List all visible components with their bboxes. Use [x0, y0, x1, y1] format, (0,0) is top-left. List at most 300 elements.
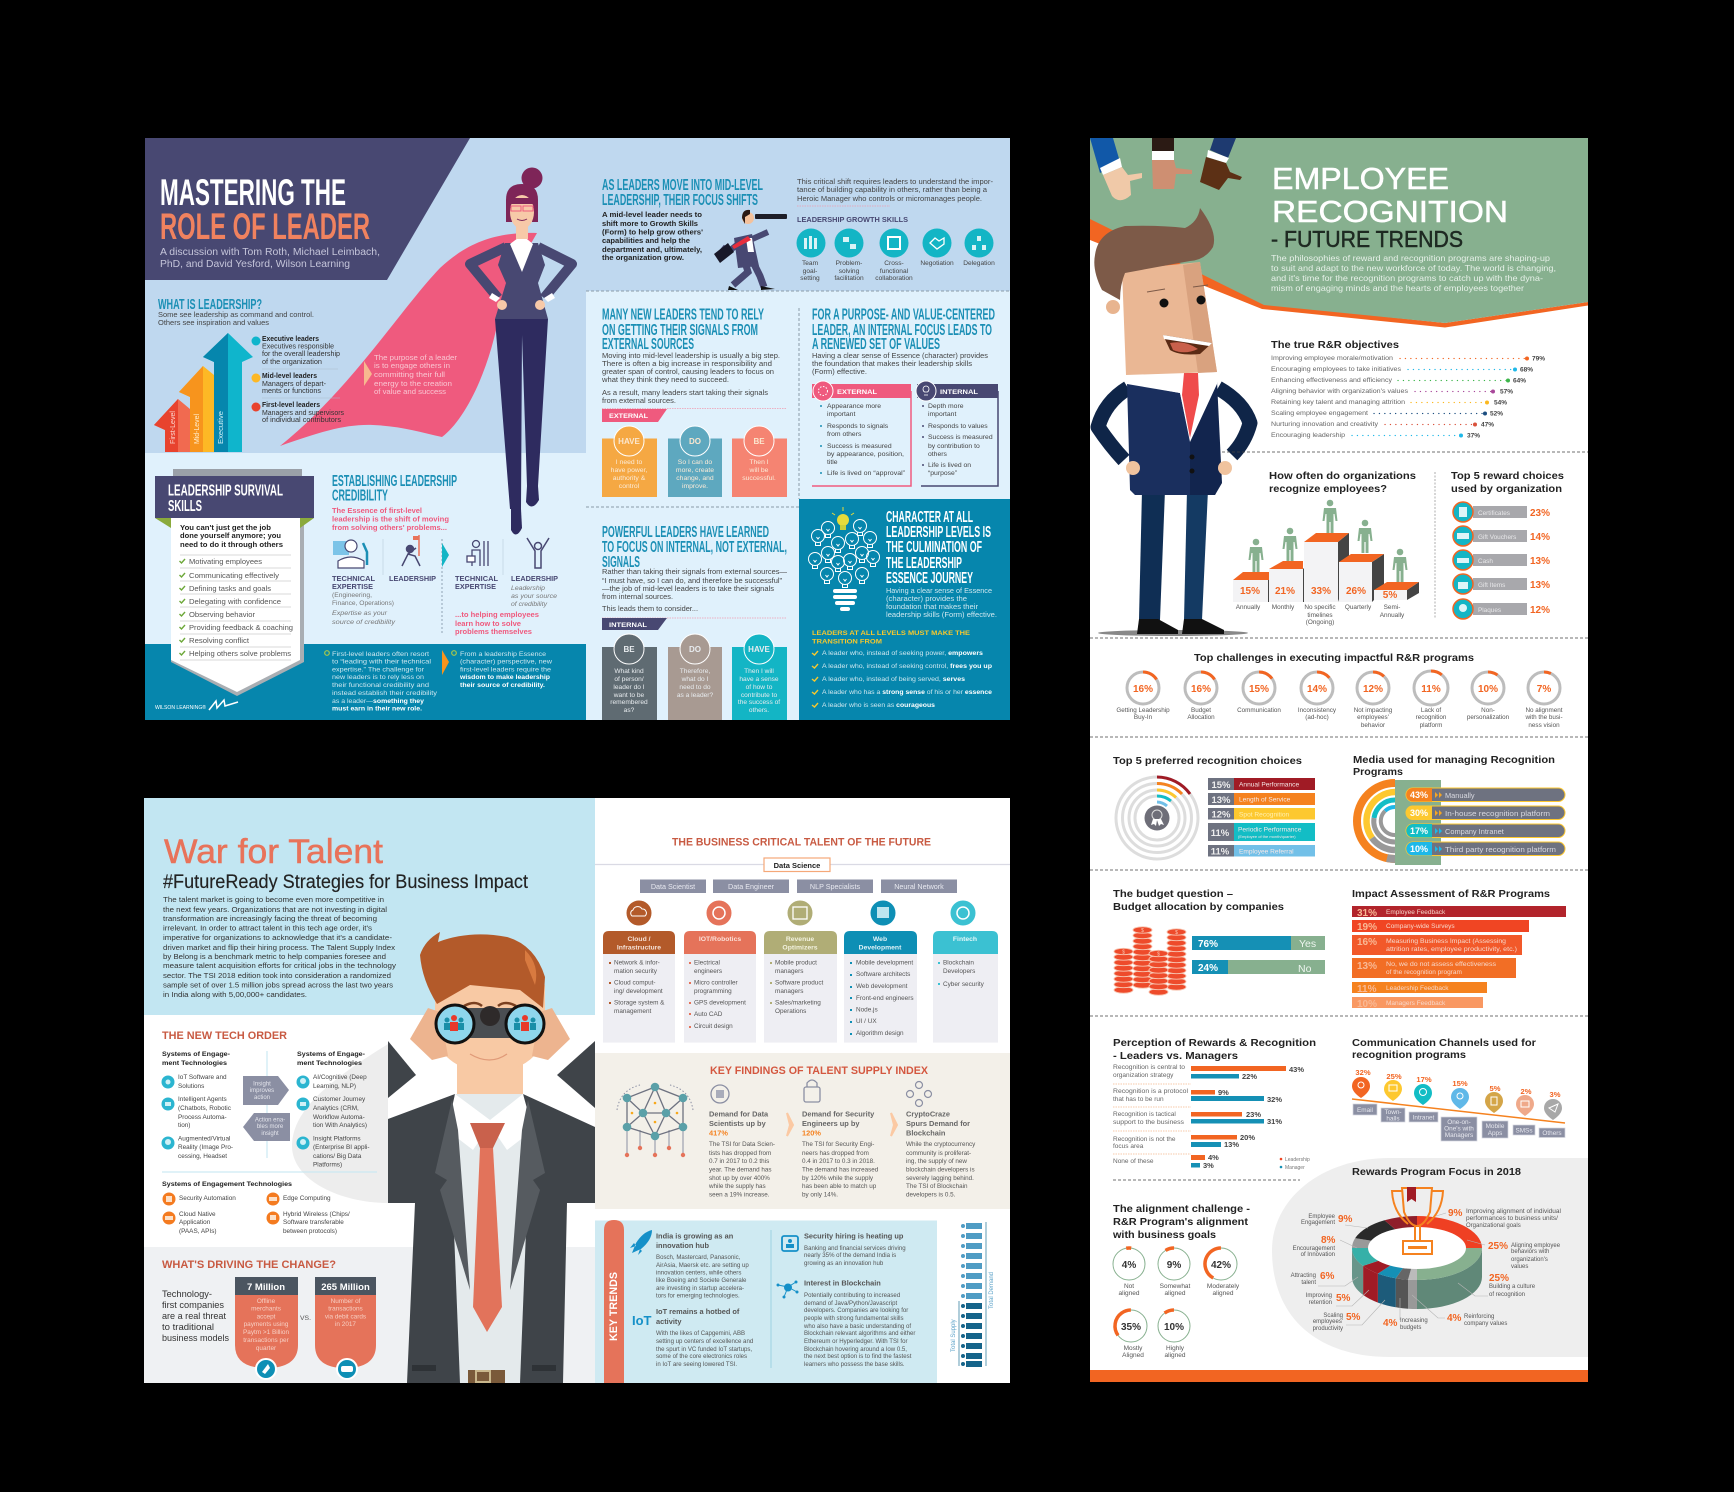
internal box: Life is lived on: [928, 462, 971, 469]
growth skills icons: functional: [880, 268, 909, 275]
column: cloud infrastructure: Storage system &: [614, 1000, 665, 1007]
dotted lollipop chart: 54%: [1494, 400, 1507, 406]
trend: security hiring: [804, 1232, 906, 1267]
icon: iot: IoT: [632, 1313, 652, 1328]
stat card: 7 million: 7 Million: [247, 1282, 285, 1293]
column: iot robotics: Circuit design: [694, 1023, 733, 1030]
finding: crypto craze: CryptoCraze: [906, 1109, 950, 1118]
section: the new tech order: Insight Platforms: [313, 1136, 361, 1142]
section: top challenges: Buy-In: [1134, 714, 1153, 721]
skills checklist: Providing feedback & coaching: [189, 623, 293, 632]
finding: crypto craze: Spurs Demand for: [906, 1119, 970, 1128]
internal box: Responds to values: [928, 423, 988, 430]
transition list: A leader who, instead of seeking power, empowers: [822, 650, 983, 657]
grouped bar chart: 23%: [1246, 1110, 1261, 1119]
external box: Appearance more: [827, 403, 881, 410]
trend: iot hotbed: some of the core electronics roles: [656, 1353, 747, 1360]
grouped bar chart: support to the business: [1113, 1119, 1185, 1126]
teal note: their source of credibility.: [460, 682, 545, 689]
leader levels list: Managers of depart-: [262, 381, 327, 388]
role tags: Data Scientist: [651, 882, 695, 891]
section: external signals: [601, 306, 787, 497]
impact bars: of the recognition program: [1386, 969, 1462, 976]
callout on cape: [364, 353, 458, 396]
impact bars: Measuring Business Impact (Assessing: [1386, 938, 1506, 945]
skills checklist: [180, 555, 293, 660]
trend: blockchain: Interest in Blockchain: [804, 1279, 881, 1288]
section: budget question: [1113, 889, 1325, 995]
transition list: A leader who, instead of being served, serves: [822, 676, 965, 683]
section: communication channels: [1352, 1037, 1565, 1141]
section: establishing leadership credibility: of credibility: [511, 601, 548, 608]
stat card: 7 million: [235, 1277, 298, 1379]
icon: trophy: [1392, 1187, 1443, 1254]
channel labels: Email: [1357, 1107, 1373, 1114]
column: iot robotics: Electrical: [694, 960, 720, 966]
section: perception leaders vs managers: - Leaders vs. Managers: [1113, 1050, 1238, 1062]
section: internal signals: —the job of mid-level leaders is to take their signals: [602, 586, 775, 593]
skills checklist: Communicating effectively: [189, 571, 279, 580]
finding: crypto craze: While the cryptocurrency: [906, 1141, 976, 1148]
column: web development: [844, 900, 917, 1043]
channel labels: One-on-: [1447, 1119, 1471, 1126]
section: internal signals: from internal sources.: [602, 594, 673, 601]
arrow: action enables more insight: insight: [261, 1131, 279, 1137]
be do have cards: others.: [749, 707, 769, 714]
icon: coin stacks: $: [1141, 928, 1144, 934]
section: what's driving the change: business models: [162, 1332, 229, 1343]
intro paragraph: by Belong is a benchmark metric to help companies foresee and: [163, 952, 386, 961]
radial target chart: [1116, 777, 1198, 859]
column: cloud infrastructure: Infrastructure: [617, 944, 661, 952]
impact bars: 13%: [1357, 961, 1377, 972]
be do have cards: of how to: [746, 684, 773, 691]
section: establishing leadership credibility: LEADERSHIP: [389, 576, 436, 583]
section: top 5 reward choices: Plaques: [1478, 607, 1501, 614]
section: key findings: KEY FINDINGS OF TALENT SUPPLY INDEX: [710, 1065, 929, 1077]
finding: crypto craze: developers is 0.5.: [906, 1191, 956, 1198]
column: cloud infrastructure: ing/ development: [614, 988, 663, 995]
podium chart: (Ongoing): [1306, 619, 1334, 626]
callout percentages: 6%: [1320, 1271, 1335, 1282]
teal note: [325, 650, 552, 712]
trend: blockchain: the next best option is to find the fastest: [804, 1353, 912, 1360]
section: top 5 reward choices: 13%: [1530, 580, 1550, 591]
leader levels list: for the overall leadership: [262, 351, 340, 358]
be do have cards: BE: [623, 645, 635, 654]
internal box: Depth more: [928, 403, 964, 410]
icon: id badge: [782, 1236, 798, 1251]
impact bars: attrition rates, employee productivity, etc.): [1386, 946, 1517, 953]
callout labels: talent: [1301, 1280, 1316, 1286]
callout percentages: 4%: [1447, 1313, 1462, 1324]
column: web development: Web: [873, 936, 887, 943]
section: top challenges: recognition: [1416, 714, 1447, 721]
section: true r&r objectives: The true R&R objectives: [1271, 339, 1399, 351]
section: alignment challenge: aligned: [1165, 1290, 1186, 1297]
grouped bar chart: Recognition is tactical: [1113, 1111, 1176, 1118]
transition list: A leader who, instead of seeking control, frees you up: [822, 663, 992, 670]
panel: leadership survival skills: You can't just get the job: [180, 523, 271, 532]
trend: blockchain: Blockchain hovering around a low 0.5,: [804, 1346, 907, 1353]
channel labels: Mobile: [1486, 1123, 1505, 1130]
budget bars: No: [1298, 963, 1312, 975]
section: communication channels: 2%: [1521, 1087, 1532, 1096]
icon: coin stacks: $: [1122, 950, 1125, 956]
teal note: First-level leaders often resort: [332, 651, 429, 658]
finding: data scientists: while the supply has: [708, 1183, 766, 1190]
section: internal signals: “I must have, so I can do, and therefore be successful”: [602, 578, 783, 585]
section: character at all levels: THE LEADERSHIP: [886, 555, 962, 572]
growth skills icons: Cross-: [884, 260, 904, 267]
section: establishing leadership credibility: [332, 473, 558, 636]
media pills: [1406, 788, 1565, 856]
teal note: as a leader—something they: [332, 698, 424, 705]
section: internal focus values: LEADER, AN INTERNAL FOCUS LEADS TO: [812, 322, 992, 339]
trend: innovation hub: are investing in startup accelera-: [656, 1285, 744, 1292]
section: top challenges: [1116, 653, 1563, 729]
teal note: (character) perspective, new: [460, 658, 552, 666]
be do have cards: as?: [624, 707, 635, 714]
stat card: 265 million: Number of: [331, 1298, 361, 1305]
grouped bar chart: None of these: [1113, 1158, 1154, 1165]
section: alignment challenge: aligned: [1213, 1290, 1234, 1297]
teal note: to “leading with their technical: [332, 658, 432, 666]
icon: technician: [333, 540, 367, 568]
be do have cards: the success of: [738, 699, 780, 706]
callout percentages: 25%: [1489, 1273, 1509, 1284]
section: business critical talent: THE BUSINESS CRITICAL TALENT OF THE FUTURE: [672, 836, 931, 848]
internal box: important: [928, 411, 956, 418]
chart: total supply vs demand: [951, 1222, 995, 1367]
section: mid-level focus shifts: the organization grow.: [602, 253, 684, 262]
dotted lollipop chart: Scaling employee engagement: [1271, 410, 1368, 417]
section: how often recognize: How often do organizations: [1269, 470, 1416, 482]
stat card: 7 million: quarter: [256, 1345, 277, 1352]
leader levels list: [252, 336, 344, 424]
section: establishing leadership credibility: problems themselves: [455, 627, 532, 636]
section: external signals: There is often a big increase in responsibility and: [602, 361, 772, 368]
callout labels: of recognition: [1489, 1292, 1525, 1298]
column: fintech: [933, 900, 998, 1043]
section: communication channels: 15%: [1452, 1079, 1468, 1088]
column: revenue optimizers: managers: [775, 988, 803, 995]
budget bars: [1192, 936, 1325, 975]
callout percentages: 25%: [1488, 1241, 1508, 1252]
trend: iot hotbed: IoT remains a hotbed of: [656, 1307, 740, 1316]
column: web development: Software architects: [856, 971, 910, 978]
section: establishing leadership credibility: The Essence of first-level: [332, 506, 422, 515]
external box: Success is measured: [827, 443, 892, 450]
column: cloud infrastructure: Cloud comput-: [614, 979, 656, 986]
icon: coin stacks: [1114, 927, 1186, 995]
media pills: In-house recognition platform: [1445, 809, 1550, 818]
role tags: Data Engineer: [728, 882, 775, 891]
channel labels: [1353, 1104, 1565, 1141]
skills checklist: Resolving conflict: [189, 636, 249, 645]
column: revenue optimizers: Sales/marketing: [775, 1000, 821, 1007]
section: external signals: ON GETTING THEIR SIGNALS FROM: [602, 322, 758, 339]
trend: blockchain: Blockchain relevant algorithms and either: [804, 1330, 915, 1337]
grouped bar chart: 31%: [1267, 1117, 1282, 1126]
panel: leadership survival skills: [155, 469, 314, 696]
section: establishing leadership credibility: source of credibility: [332, 619, 396, 626]
leader levels list: Managers and supervisors: [262, 410, 344, 417]
channel labels: Apps: [1488, 1130, 1502, 1137]
podium chart: Monthly: [1272, 604, 1295, 611]
section: top challenges: with the busi-: [1524, 714, 1563, 721]
title banner: MASTERING THE: [160, 172, 346, 213]
trend: iot hotbed: in IoT are seeing lowered TSI.: [656, 1361, 737, 1368]
transition list: A leader who has a strong sense of his or her essence: [822, 689, 992, 696]
callout labels: Increasing: [1400, 1318, 1428, 1324]
be do have cards: Therefore,: [680, 668, 710, 675]
section: the new tech order: Edge Computing: [283, 1195, 331, 1202]
panel: leadership survival skills: done yourself anymore; you: [180, 531, 281, 540]
section: establishing leadership credibility: TECHNICAL: [332, 576, 376, 583]
section: character at all levels: THE CULMINATION OF: [886, 539, 982, 556]
be do have cards: remembered: [610, 699, 648, 706]
role tags: Neural Network: [894, 882, 944, 891]
section: what's driving the change: Technology-: [162, 1288, 212, 1299]
dotted lollipop chart: Enhancing effectiveness and efficiency: [1271, 377, 1393, 384]
section: character at all levels: Having a clear sense of Essence: [886, 588, 992, 595]
section: the new tech order: Learning, NLP): [313, 1083, 356, 1090]
trend: security hiring: Banking and financial services driving: [804, 1245, 906, 1252]
skills checklist: Defining tasks and goals: [189, 584, 271, 593]
be do have cards: contribute to: [741, 692, 777, 699]
impact bars: [1352, 906, 1566, 1010]
section: alignment challenge: 35%: [1121, 1322, 1141, 1333]
section: internal signals: SIGNALS: [602, 554, 640, 571]
teal note: their functional credibility and: [332, 682, 429, 689]
stat card: 7 million: Offline: [257, 1298, 276, 1305]
section: top challenges: Lack of: [1421, 707, 1441, 714]
section: top 5 reward choices: Gift Vouchers: [1478, 534, 1516, 541]
teal note: expertise.” The challenge for: [332, 666, 425, 674]
teal note: new leaders is to rely less on: [332, 674, 424, 681]
header banner: [1090, 138, 1588, 323]
icon: three rising arrows: Mid-Level: [194, 414, 201, 444]
finding: security engineers: by 120% while the supply: [802, 1175, 874, 1182]
podium chart: timelines: [1307, 612, 1333, 619]
section: mid-level focus shifts: department and, ultimately,: [602, 245, 702, 254]
section: internal focus values: A RENEWED SET OF VALUES: [812, 336, 940, 353]
finding: data scientists: The TSI for Data Scien-: [709, 1141, 775, 1148]
trend: iot hotbed: activity: [656, 1317, 682, 1326]
media pills: Company Intranet: [1445, 827, 1504, 836]
section: character at all levels: (character) provides the: [886, 596, 967, 603]
title banner: PhD, and David Yesford, Wilson Learning: [160, 259, 350, 270]
callout labels: Scaling: [1323, 1313, 1343, 1319]
impact bars: 10%: [1357, 999, 1377, 1010]
dotted lollipop chart: Aligning behavior with organization's values: [1271, 388, 1409, 395]
finding: security engineers: has been able to match up: [802, 1183, 877, 1190]
section: top challenges: Top challenges in executing impactful R&R programs: [1194, 653, 1474, 664]
finding: data scientists: [708, 1085, 775, 1198]
section: the new tech order: (Enterprise BI appli-: [313, 1144, 369, 1151]
channel pins: [1352, 1077, 1562, 1120]
section: the new tech order: Systems of Engage-: [297, 1051, 365, 1058]
section: the new tech order: Workflow Automa-: [313, 1114, 365, 1121]
transition list: [812, 650, 992, 709]
finding: security engineers: Demand for Security: [802, 1109, 875, 1118]
stat card: 265 million: via debit cards: [325, 1314, 366, 1320]
intro paragraph: the next few years. Organizations that are not investing in digital: [163, 905, 387, 914]
section: mid-level focus shifts: capabilities and help the: [602, 236, 690, 245]
section: internal signals: INTERNAL: [609, 622, 647, 629]
section: top challenges: platform: [1420, 722, 1442, 729]
budget bars: 24%: [1198, 963, 1218, 974]
grouped bar chart: 32%: [1267, 1095, 1282, 1104]
column: web development: Mobile development: [856, 960, 913, 966]
icon: climbing leader: [402, 535, 420, 566]
callout labels: employees': [1313, 1319, 1343, 1325]
gray swoosh behind man: [292, 1044, 388, 1203]
header banner: to suit and adapt to the new workforce of today. The world is changing,: [1271, 263, 1556, 273]
trend: innovation hub: AirAsia, Maersk etc. are setting up: [656, 1262, 749, 1269]
column: web development: Node.js: [856, 1007, 878, 1014]
callout percentages: 5%: [1346, 1312, 1361, 1323]
callout labels: behaviors with: [1511, 1249, 1549, 1255]
title: #FutureReady Strategies for Business Impact: [163, 872, 529, 893]
grouped bar chart: organization strategy: [1113, 1072, 1174, 1079]
section: top 5 reward choices: Cash: [1478, 558, 1493, 565]
have do be cards: [602, 426, 787, 497]
column: cloud infrastructure: Cloud /: [627, 936, 651, 943]
column: fintech: Developers: [943, 968, 975, 975]
section: alignment challenge: aligned: [1165, 1352, 1186, 1359]
have do be cards: HAVE: [618, 437, 640, 446]
channel labels: SMSs: [1515, 1128, 1533, 1134]
skills checklist: Motivating employees: [189, 557, 262, 566]
trend: innovation hub: like Boeing and Societe Generale: [656, 1277, 747, 1284]
impact bars: 19%: [1357, 922, 1377, 933]
stacked bars: Employee Referral: [1239, 848, 1294, 856]
finding: security engineers: [802, 1080, 879, 1198]
section: business critical talent: [595, 836, 1010, 1043]
section: the new tech order: Cloud Native: [179, 1211, 216, 1218]
dotted lollipop chart: Improving employee morale/motivation: [1271, 355, 1393, 362]
section: rewards program focus: Rewards Program Focus in 2018: [1352, 1166, 1521, 1178]
have do be cards: I need to: [616, 459, 642, 466]
section: establishing leadership credibility: (Engineering,: [332, 592, 372, 599]
podium chart: No specific: [1304, 604, 1336, 611]
icon: man with telescope: [714, 210, 787, 290]
leader levels list: Executive leaders: [262, 336, 319, 343]
leader levels list: of individual contributors: [262, 417, 342, 424]
donut rings: [1127, 671, 1560, 705]
growth skills icons: solving: [839, 268, 860, 275]
section: top challenges: 7%: [1537, 684, 1551, 695]
internal box: Success is measured: [928, 434, 993, 441]
section: top challenges: Inconsistency: [1298, 707, 1337, 714]
dotted lollipop chart: 64%: [1513, 378, 1526, 384]
arrow: insight improves action: Insight: [253, 1082, 271, 1088]
section: external signals: from external sources.: [602, 398, 676, 405]
media pills: 10%: [1410, 844, 1428, 854]
section: communication channels: 32%: [1355, 1068, 1371, 1077]
impact bars: Managers Feedback: [1386, 1000, 1446, 1007]
orange tech icons: [162, 1192, 280, 1224]
column: web development: Web development: [856, 983, 908, 990]
section: the new tech order: THE NEW TECH ORDER: [162, 1030, 287, 1042]
section: mid-level focus shifts: A mid-level leader needs to: [602, 210, 702, 219]
section: top challenges: Non-: [1481, 707, 1495, 714]
panel: leadership survival skills: SKILLS: [168, 498, 202, 515]
callout labels: Aligning employee: [1511, 1243, 1561, 1249]
section: budget question: Budget allocation by companies: [1113, 902, 1284, 913]
callout labels: productivity: [1313, 1326, 1343, 1332]
section: what's driving the change: [162, 1259, 376, 1379]
section: mid-level focus shifts: LEADERSHIP, THEIR FOCUS SHIFTS: [602, 192, 758, 209]
trend: innovation hub: [656, 1232, 749, 1300]
section: top 5 reward choices: [1451, 470, 1564, 619]
dotted lollipop chart: Nurturing innovation and creativity: [1271, 421, 1379, 428]
section: top challenges: employees': [1357, 714, 1389, 721]
have do be cards: BE: [753, 437, 765, 446]
have do be cards: successful.: [742, 475, 776, 482]
grouped bar chart: 22%: [1242, 1072, 1257, 1081]
column: cloud infrastructure: [603, 900, 675, 1043]
section: the new tech order: Customer Journey: [313, 1096, 366, 1103]
column: iot robotics: Micro controller: [694, 979, 739, 986]
section: character at all levels: TRANSITION FROM: [812, 638, 883, 646]
dotted lollipop chart: 52%: [1490, 410, 1503, 418]
section: mid-level focus shifts: Heroic Manager who controls or micromanages people.: [797, 196, 982, 203]
trend: blockchain: who also have a basic understanding of: [803, 1323, 911, 1330]
impact bars: Leadership Feedback: [1386, 985, 1449, 992]
chart: total supply vs demand: Total Demand: [989, 1272, 995, 1309]
have do be cards: will be: [749, 467, 769, 474]
section: communication channels: Communication Channels used for: [1352, 1037, 1536, 1049]
internal box: [916, 381, 998, 486]
stat card: 265 million: 265 Million: [321, 1282, 370, 1293]
grouped bar chart: focus area: [1113, 1143, 1144, 1150]
figure: man with binoculars: [388, 932, 595, 1383]
section: the new tech order: Reality (Image Pro-: [178, 1144, 233, 1151]
column: revenue optimizers: Optimizers: [782, 944, 818, 952]
icon: pointing hands: [1090, 138, 1242, 200]
be do have cards: of person/: [614, 676, 644, 683]
icon: arms raised leader: [527, 538, 549, 568]
dotted lollipop chart: Encouraging leadership: [1271, 432, 1345, 439]
impact bars: Employee Feedback: [1386, 909, 1446, 916]
stat card: 7 million: Paytm >1 Billion: [243, 1329, 289, 1336]
callout percentages: 4%: [1383, 1318, 1398, 1329]
section: the new tech order: ment Technologies: [162, 1060, 227, 1067]
column: web development: Front-end engineers: [856, 995, 914, 1002]
section: mid-level focus shifts: This critical shift requires leaders to understand the impor-: [797, 179, 994, 186]
finding: crypto craze: ing, the supply of new: [906, 1158, 967, 1165]
external box: Life is lived on “approval”: [827, 470, 906, 477]
section: top challenges: 15%: [1249, 684, 1269, 695]
section: mid-level focus shifts: [602, 177, 995, 290]
stat card: 7 million: accept: [257, 1314, 276, 1320]
section: character at all levels: CHARACTER AT ALL: [886, 509, 973, 526]
section: preferred recognition choices: Top 5 preferred recognition choices: [1113, 756, 1302, 767]
icon: three rising arrows: [154, 333, 253, 452]
column: revenue optimizers: [764, 900, 837, 1043]
stacked bars: (Employee of the month/quarter): [1238, 834, 1296, 839]
arrow: insight improves action: improves: [250, 1088, 274, 1094]
section: the new tech order: Systems of Engage-: [162, 1051, 230, 1058]
dotted lollipop chart: 37%: [1467, 432, 1480, 440]
channel labels: halls: [1386, 1116, 1400, 1122]
callout on cape: energy to the creation: [374, 379, 452, 388]
section: top challenges: Communication: [1237, 707, 1281, 714]
callout percentages: [1320, 1208, 1509, 1329]
